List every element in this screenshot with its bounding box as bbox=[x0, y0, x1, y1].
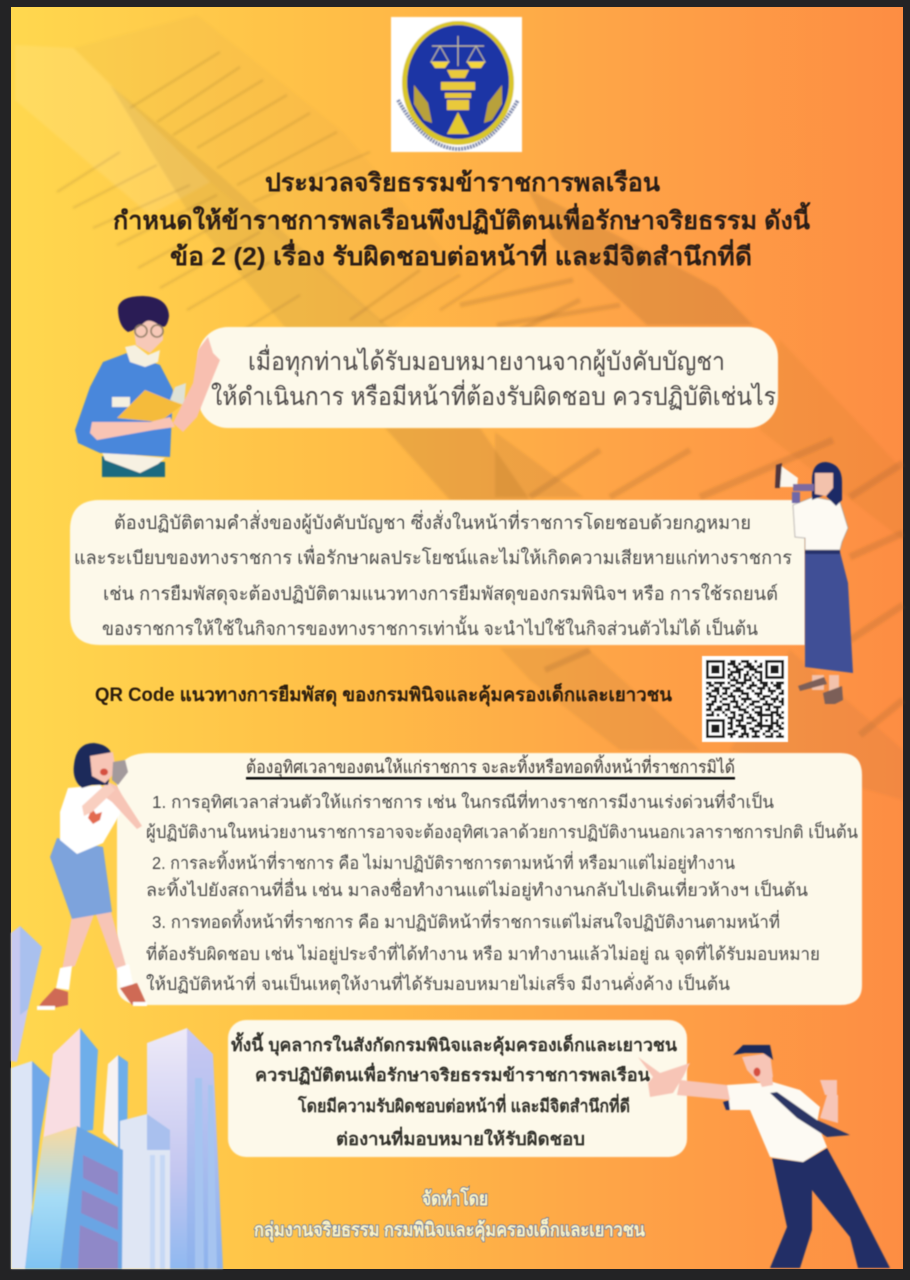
footer credit bbox=[254, 1187, 645, 1242]
icon: city buildings bbox=[11, 926, 223, 1269]
closing text: โดยมีความรับผิดชอบต่อหน้าที่ และมีจิตสำนึกที่ดี bbox=[297, 1093, 630, 1116]
question text bbox=[211, 344, 776, 411]
instruction paragraph bbox=[74, 510, 792, 639]
closing text: ต่องานที่มอบหมายให้รับผิดชอบ bbox=[336, 1126, 585, 1149]
icon: woman calling out bbox=[37, 743, 147, 1010]
list items: 3. การทอดทิ้งหน้าที่ราชการ คือ มาปฏิบัติหน้าที่ราชการแต่ไม่สนใจปฏิบัติงานตามหน้าที่ bbox=[152, 909, 780, 932]
question text: ให้ดำเนินการ หรือมีหน้าที่ต้องรับผิดชอบ ควรปฏิบัติเช่นไร bbox=[211, 379, 776, 411]
closing text: ควรปฏิบัติตนเพื่อรักษาจริยธรรมข้าราชการพลเรือน bbox=[255, 1062, 650, 1085]
instruction paragraph: ของราชการให้ใช้ในกิจการของทางราชการเท่านั้น จะนำไปใช้ในกิจส่วนตัวไม่ได้ เป็นต้น bbox=[102, 615, 758, 639]
title: ประมวลจริยธรรมข้าราชการพลเรือน bbox=[265, 169, 660, 197]
closing text bbox=[231, 1032, 677, 1149]
instruction paragraph: ต้องปฏิบัติตามคำสั่งของผู้บังคับบัญชา ซึ่งสั่งในหน้าที่ราชการโดยชอบด้วยกฎหมาย bbox=[114, 510, 751, 534]
panel: closing statement bbox=[228, 1020, 687, 1157]
list items: 2. การละทิ้งหน้าที่ราชการ คือ ไม่มาปฏิบัติราชการตามหน้าที่ หรือมาแต่ไม่อยู่ทำงาน bbox=[152, 850, 735, 874]
question text: เมื่อทุกท่านได้รับมอบหมายงานจากผู้บังคับบัญชา bbox=[248, 344, 725, 377]
QR caption: QR Code แนวทางการยืมพัสดุ ของกรมพินิจและคุ้มครองเด็กและเยาวชน bbox=[95, 682, 672, 707]
list items: 1. การอุทิศเวลาส่วนตัวให้แก่ราชการ เช่น ในกรณีที่ทางราชการมีงานเร่งด่วนที่จำเป็น bbox=[152, 790, 774, 813]
icon: man with book bbox=[75, 296, 220, 477]
background ruler pattern bbox=[15, 15, 903, 800]
panel: duties list bbox=[117, 753, 862, 1005]
icon: man pointing bbox=[638, 1045, 890, 1268]
icon: woman with megaphone bbox=[775, 462, 853, 704]
list items bbox=[146, 790, 858, 995]
footer credit: จัดทำโดย bbox=[422, 1187, 488, 1210]
list items: ที่ต้องรับผิดชอบ เช่น ไม่อยู่ประจำที่ได้ทำงาน หรือ มาทำงานแล้วไม่อยู่ ณ จุดที่ได้รับมอบหมาย bbox=[146, 942, 820, 965]
panel: question bubble bbox=[198, 327, 778, 428]
title: ข้อ 2 (2) เรื่อง รับผิดชอบต่อหน้าที่ และมีจิตสำนึกที่ดี bbox=[170, 239, 752, 271]
list heading: ต้องอุทิศเวลาของตนให้แก่ราชการ จะละทิ้งหรือทอดทิ้งหน้าที่ราชการมิได้ bbox=[246, 754, 735, 778]
instruction paragraph: และระเบียบของทางราชการ เพื่อรักษาผลประโยชน์และไม่ให้เกิดความเสียหายแก่ทางราชการ bbox=[74, 545, 792, 568]
closing text: ทั้งนี้ บุคลากรในสังกัดกรมพินิจและคุ้มครองเด็กและเยาวชน bbox=[231, 1032, 677, 1056]
list items: ให้ปฏิบัติหน้าที่ จนเป็นเหตุให้งานที่ได้รับมอบหมายไม่เสร็จ มีงานคั่งค้าง เป็นต้น bbox=[146, 972, 730, 995]
logo bbox=[391, 17, 522, 152]
title bbox=[113, 169, 811, 271]
footer credit: กลุ่มงานจริยธรรม กรมพินิจและคุ้มครองเด็กและเยาวชน bbox=[254, 1217, 645, 1242]
title: กำหนดให้ข้าราชการพลเรือนพึงปฏิบัติตนเพื่อรักษาจริยธรรม ดังนี้ bbox=[113, 201, 811, 235]
QR code bbox=[702, 656, 788, 742]
instruction paragraph: เช่น การยืมพัสดุจะต้องปฏิบัติตามแนวทางการยืมพัสดุของกรมพินิจฯ หรือ การใช้รถยนต์ bbox=[103, 583, 778, 606]
list items: ผู้ปฏิบัติงานในหน่วยงานราชการอาจจะต้องอุทิศเวลาด้วยการปฏิบัติงานนอกเวลาราชการปกติ เป็นต้น bbox=[146, 821, 858, 843]
panel: instruction text bbox=[70, 500, 805, 645]
list items: ละทิ้งไปยังสถานที่อื่น เช่น มาลงชื่อทำงานแต่ไม่อยู่ทำงานกลับไปเดินเที่ยวห้างฯ เป็นต้น bbox=[146, 877, 808, 901]
